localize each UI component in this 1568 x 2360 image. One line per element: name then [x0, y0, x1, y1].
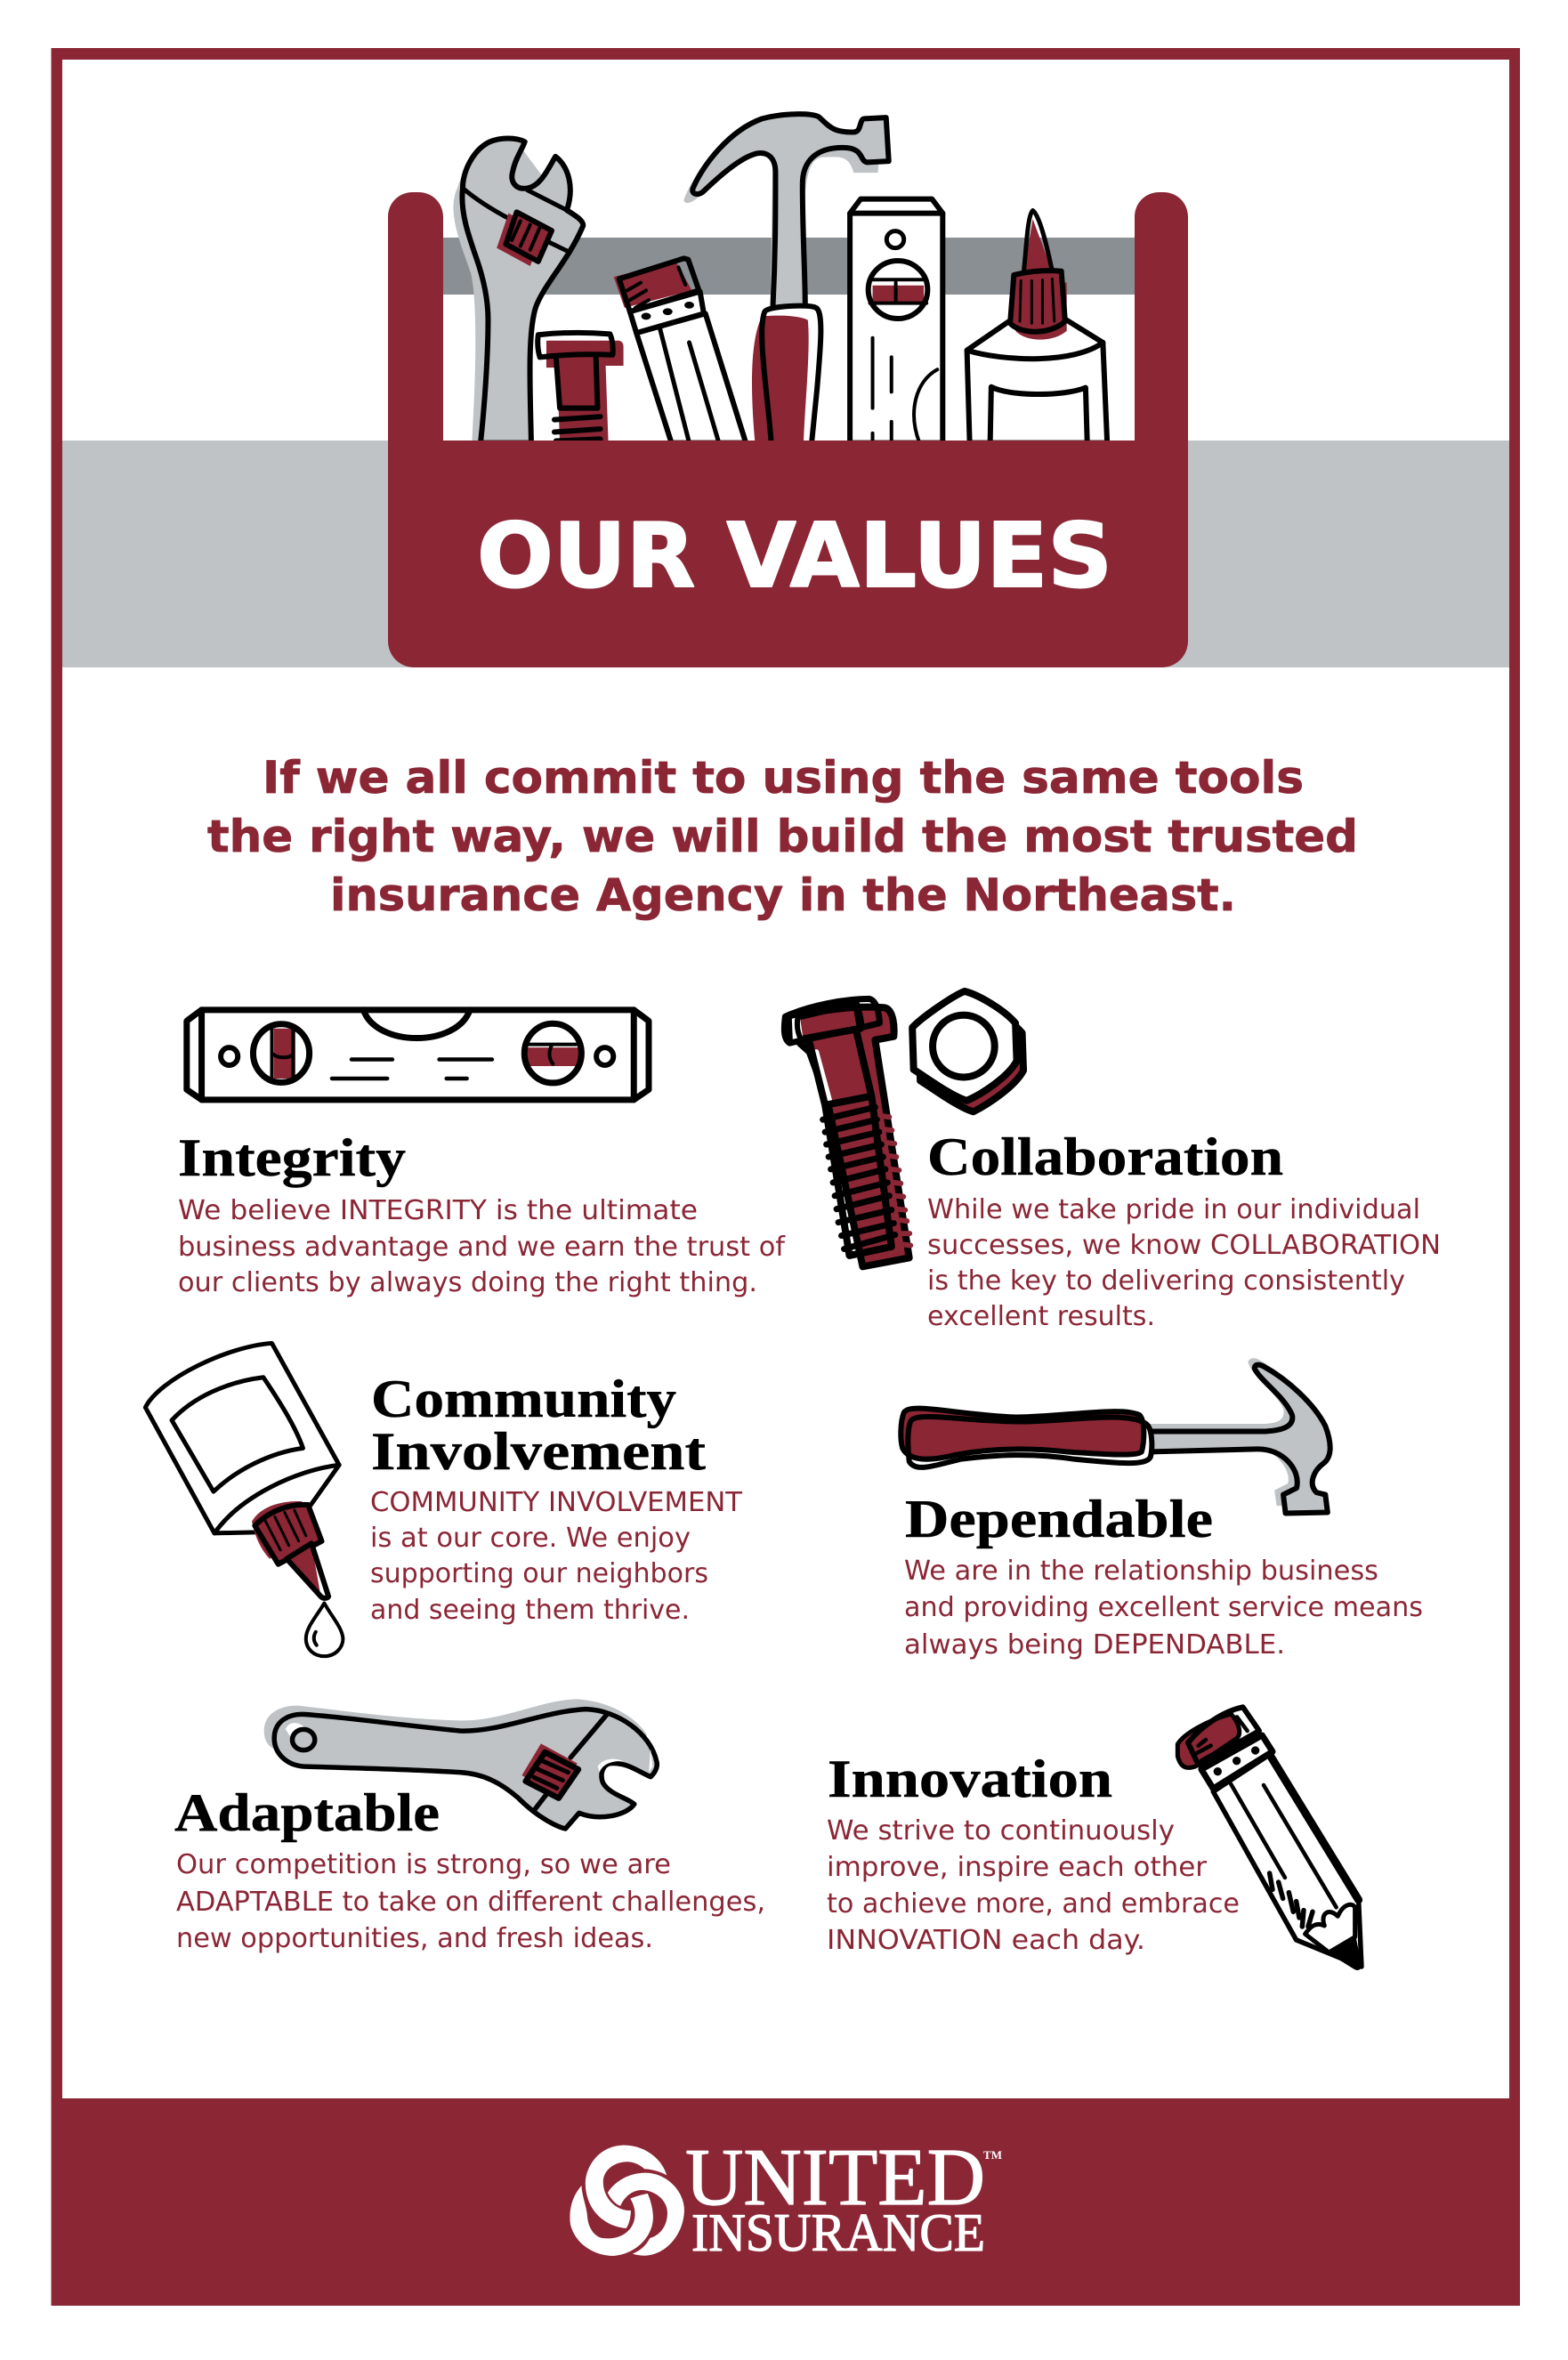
icon: wrench [264, 1699, 657, 1829]
logo wordmark: INSURANCE: INSURANCE [691, 2203, 985, 2262]
icon: level [187, 1010, 649, 1100]
tagline [207, 752, 1358, 921]
icon: pencil in toolbox [614, 258, 746, 443]
panel: dependable [901, 1358, 1423, 1661]
tagline: the right way, we will build the most trusted [207, 811, 1358, 862]
heading: Innovation: Innovation [828, 1750, 1112, 1808]
body: integrity [178, 1195, 786, 1298]
icon: level in toolbox [850, 199, 942, 443]
body: innovation: to achieve more, and embrace [827, 1888, 1240, 1920]
panel: integrity [178, 1010, 786, 1298]
body: adaptable: new opportunities, and fresh ideas. [176, 1923, 653, 1954]
body: integrity: our clients by always doing the right thing. [178, 1267, 757, 1298]
icon: hammer in toolbox [683, 114, 889, 443]
toolbox with title [388, 192, 1188, 667]
icon: glue bottle in toolbox [967, 211, 1107, 443]
body: innovation: improve, inspire each other [827, 1852, 1208, 1883]
body: collaboration [927, 1194, 1441, 1332]
icon: hammer [901, 1358, 1330, 1513]
gray title band [62, 440, 1509, 667]
body: adaptable: ADAPTABLE to take on different challenges, [176, 1887, 765, 1918]
heading: Adaptable: Adaptable [174, 1783, 440, 1842]
body: adaptable: Our competition is strong, so we are [176, 1849, 671, 1880]
body: community involvement [370, 1487, 743, 1626]
body: collaboration: While we take pride in our individual [927, 1194, 1420, 1225]
body: integrity: business advantage and we earn the trust of [178, 1232, 786, 1263]
panel: community involvement [145, 1343, 743, 1656]
heading: Integrity: Integrity [178, 1128, 406, 1187]
heading: Dependable: Dependable [905, 1490, 1213, 1548]
panel: collaboration [784, 991, 1441, 1332]
title: OUR VALUES: OUR VALUES [477, 504, 1112, 608]
panel: adaptable [174, 1699, 765, 1954]
logo: United Insurance [570, 2132, 1002, 2262]
body: collaboration: excellent results. [927, 1301, 1155, 1332]
body: dependable: We are in the relationship business [904, 1556, 1378, 1587]
icon: bolt and nut [784, 991, 1023, 1266]
body: adaptable [176, 1849, 765, 1954]
logo wordmark: UNITED: UNITED [685, 2132, 985, 2222]
body: dependable [904, 1556, 1423, 1661]
body: community involvement: COMMUNITY INVOLVEMENT [370, 1487, 743, 1518]
body: innovation: We strive to continuously [827, 1815, 1175, 1847]
body: collaboration: is the key to delivering consistently [927, 1265, 1405, 1297]
body: community involvement: and seeing them thrive. [370, 1595, 690, 1626]
panel: innovation [827, 1707, 1362, 1969]
icon: bolt in toolbox [537, 333, 624, 443]
body: innovation [827, 1815, 1240, 1956]
trademark: TM [983, 2148, 1002, 2162]
body: innovation: INNOVATION each day. [827, 1925, 1145, 1956]
tagline: If we all commit to using the same tools [263, 752, 1304, 804]
body: collaboration: successes, we know COLLABORATION [927, 1230, 1441, 1261]
body: dependable: always being DEPENDABLE. [904, 1629, 1285, 1661]
logo mark: three interlocking rings [570, 2146, 684, 2256]
icon: pencil [1177, 1707, 1362, 1969]
illustration: tools in toolbox [453, 114, 1107, 443]
heading: Community Involvement [371, 1370, 706, 1481]
footer band with logo [52, 2098, 1520, 2306]
icon: wrench in toolbox [453, 138, 583, 443]
icon: glue bottle [145, 1343, 343, 1656]
body: community involvement: supporting our neighbors [370, 1558, 708, 1589]
tagline: insurance Agency in the Northeast. [330, 869, 1236, 921]
body: dependable: and providing excellent service means [904, 1592, 1423, 1623]
toolbox back stripe [443, 238, 1135, 295]
body: integrity: We believe INTEGRITY is the ultimate [178, 1195, 698, 1226]
body: community involvement: is at our core. We enjoy [370, 1523, 691, 1554]
heading: Community Involvement: Involvement [371, 1422, 706, 1481]
heading: Community Involvement: Community [371, 1370, 676, 1428]
heading: Collaboration: Collaboration [927, 1127, 1283, 1186]
